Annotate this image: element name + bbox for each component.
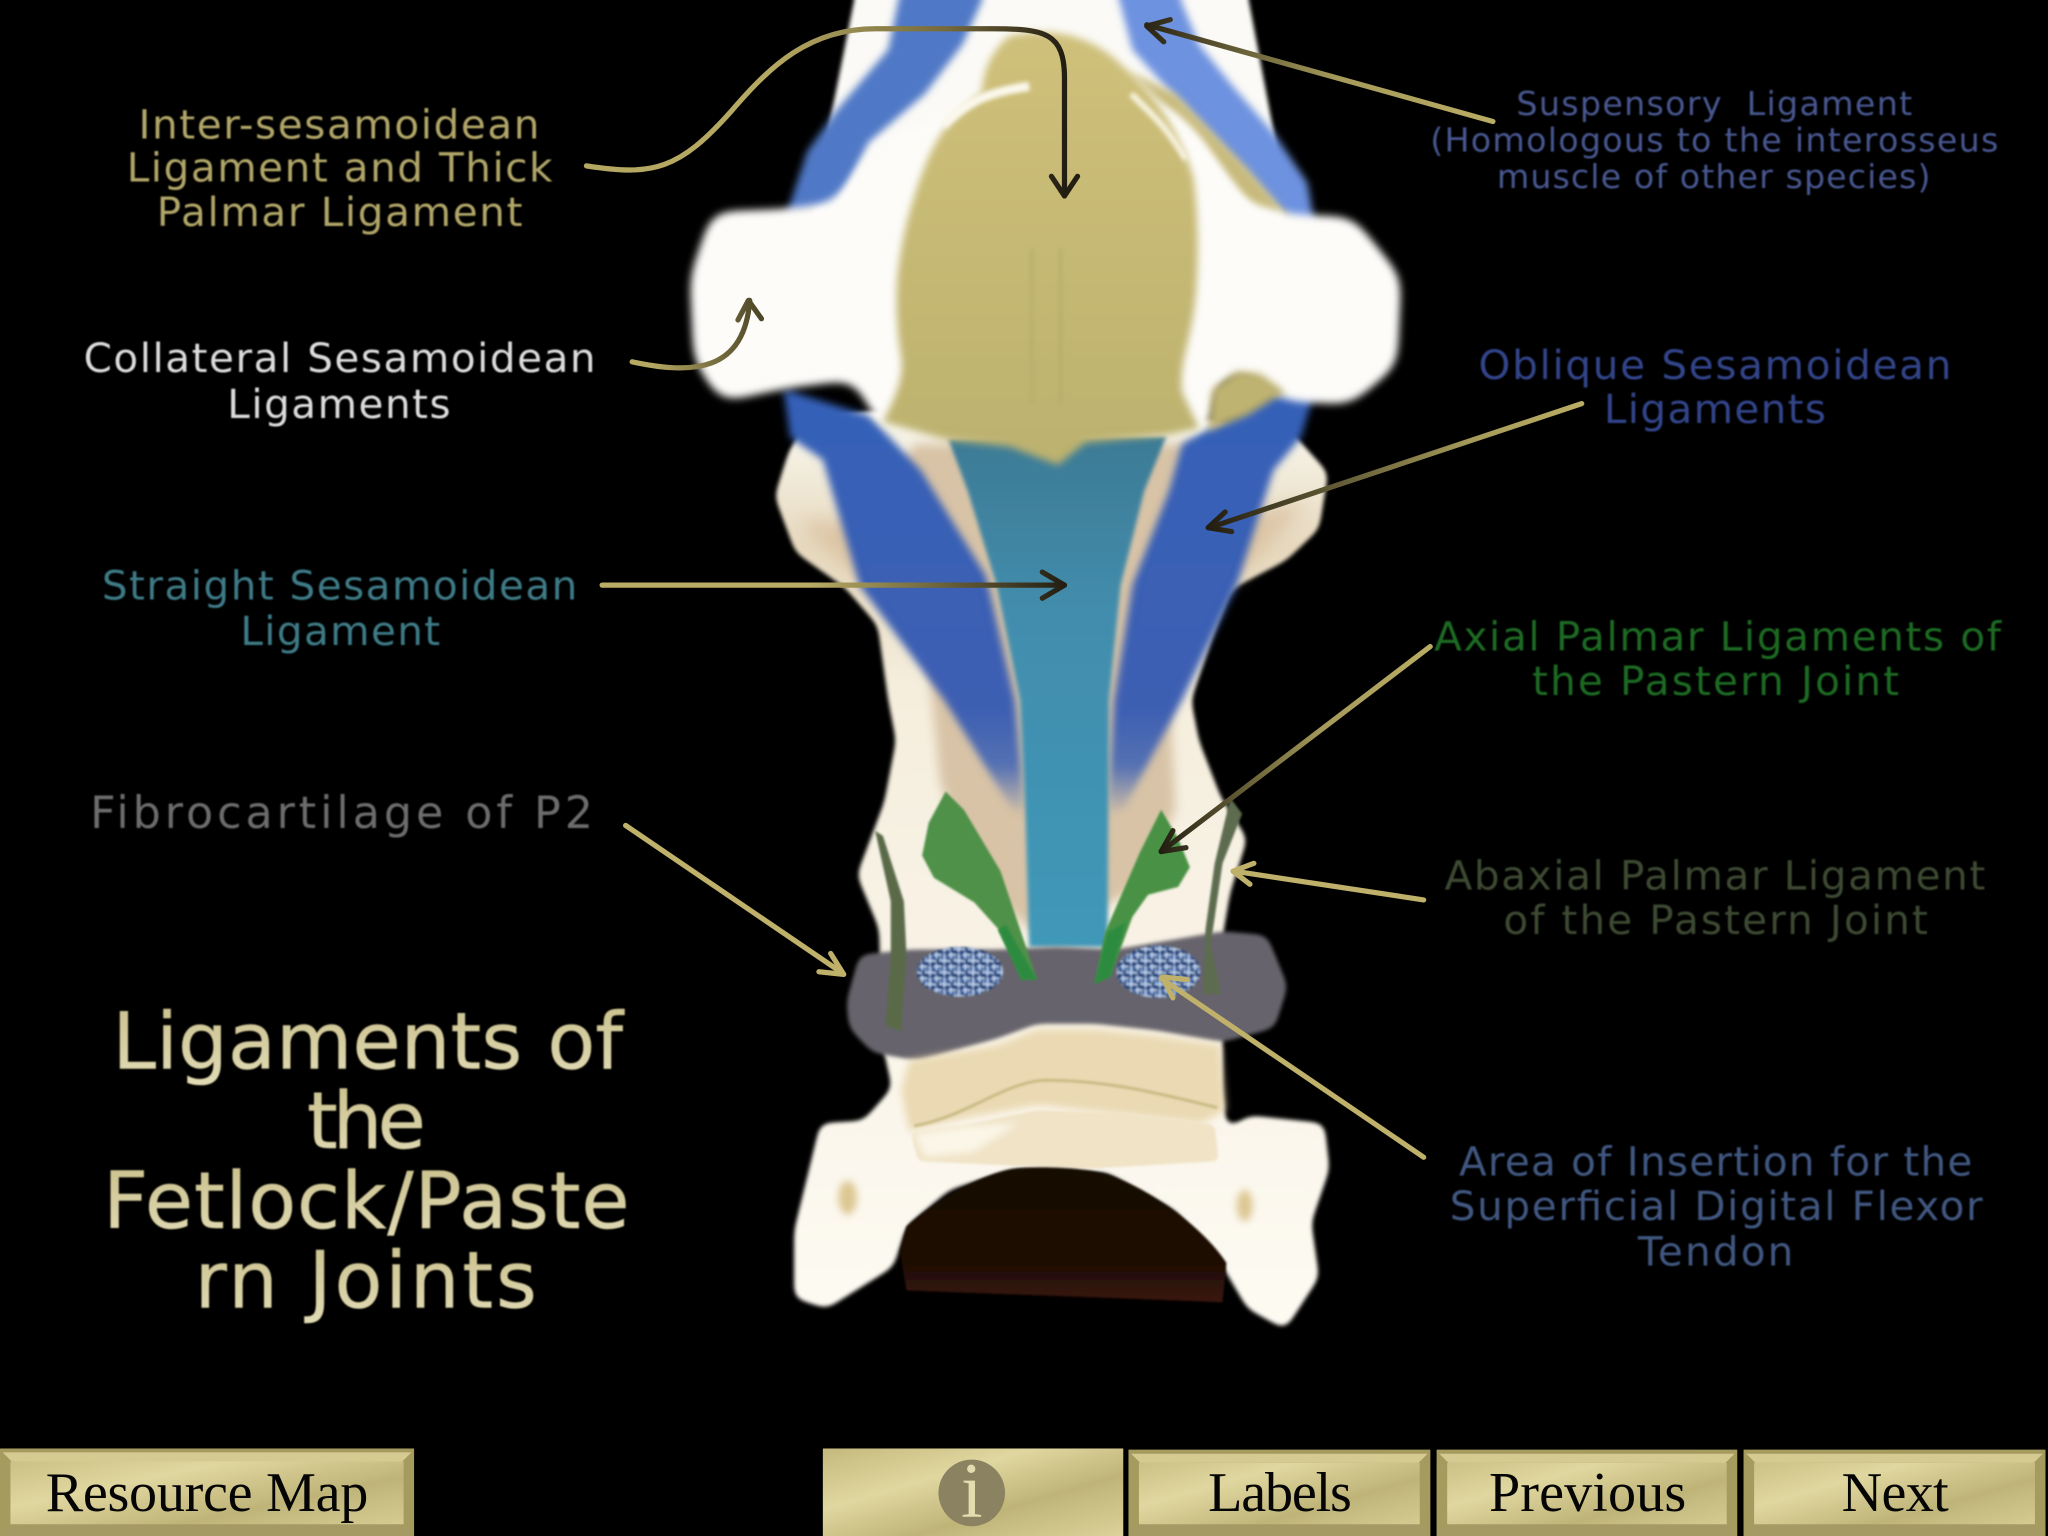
- label: suspensory ligament: Suspensory Ligament: [1516, 84, 1912, 123]
- title: [103, 996, 630, 1326]
- beige inner bone surface: [862, 444, 1215, 940]
- label: oblique sesamoidean ligaments: [1479, 341, 1951, 433]
- label: suspensory ligament: (Homologous to the interosseus: [1430, 121, 1998, 160]
- arrow: straight: [602, 572, 1064, 598]
- label: inter-sesamoidean ligament: Inter-sesamoidean: [138, 100, 539, 148]
- yellow strip beside the right suspensory band: [1130, 72, 1293, 222]
- label: abaxial palmar ligament: of the Pastern Joint: [1503, 896, 1928, 944]
- title: Fetlock/Paste: [103, 1156, 630, 1247]
- tan flare shading on the upper pastern: [799, 503, 1306, 601]
- arrow: area of insertion: [1161, 977, 1424, 1157]
- small yellow ligament patch at right: [1208, 371, 1285, 431]
- label: area of insertion: [1450, 1138, 1983, 1276]
- abaxial palmar ligaments: [875, 798, 1242, 1032]
- label: area of insertion: Tendon: [1637, 1228, 1793, 1276]
- button: next: [1744, 1450, 2045, 1536]
- white highlight on the roller: [914, 1123, 1019, 1157]
- button: info: i: [961, 1446, 983, 1533]
- white sliver on the right of the ligament: [1131, 94, 1186, 159]
- label: inter-sesamoidean ligament: [127, 100, 553, 236]
- pastern joint line: [914, 1080, 1217, 1126]
- button: labels: Labels: [1208, 1462, 1352, 1524]
- dark arch of the distal surface: [900, 1167, 1226, 1302]
- title: rn Joints: [195, 1235, 537, 1326]
- label: collateral sesamoidean ligaments: Collateral Sesamoidean: [84, 334, 596, 382]
- sesamoid bones: [690, 78, 1401, 431]
- button: resource map: [0, 1448, 414, 1536]
- central ridge on the ligament: [1032, 248, 1061, 405]
- button: previous: Previous: [1489, 1462, 1686, 1524]
- anatomical specimen: fetlock and pastern: [690, 0, 1401, 1330]
- label: straight sesamoidean ligament: Ligament: [240, 607, 440, 655]
- arrow: oblique: [1208, 404, 1582, 532]
- label: axial palmar ligaments: Axial Palmar Ligaments of: [1434, 612, 2003, 660]
- straight sesamoidean ligament: [948, 436, 1166, 947]
- arrow: suspensory: [1147, 20, 1493, 121]
- button: info: [823, 1446, 1123, 1536]
- axial palmar ligaments: [922, 792, 1190, 984]
- button: resource map: Resource Map: [46, 1462, 368, 1524]
- lower roller of bone: [910, 1110, 1219, 1169]
- darker feet of the axial ligaments: [998, 922, 1126, 984]
- tan spots on the bone feet: [839, 1181, 1253, 1221]
- title: Ligaments of: [112, 996, 625, 1087]
- upper suspensory ligament bands: [786, 0, 1315, 229]
- label: inter-sesamoidean ligament: Ligament and Thick: [127, 144, 553, 192]
- arrow: axial: [1161, 647, 1430, 852]
- lower bone outline: [775, 392, 1330, 1330]
- label: axial palmar ligaments: [1434, 612, 2003, 705]
- label: fibrocartilage of P2: Fibrocartilage of P2: [90, 788, 593, 839]
- label: oblique sesamoidean ligaments: Ligaments: [1604, 385, 1826, 433]
- label: axial palmar ligaments: the Pastern Joint: [1532, 657, 1899, 705]
- white bone highlights near the pad: [882, 836, 1215, 947]
- label: straight sesamoidean ligament: Straight Sesamoidean: [102, 562, 577, 610]
- arrow: collateral: [632, 300, 761, 368]
- label: oblique sesamoidean ligaments: Oblique Sesamoidean: [1479, 341, 1951, 389]
- label: inter-sesamoidean ligament: Palmar Ligament: [157, 188, 522, 236]
- P2 cream band: [901, 1029, 1225, 1131]
- label: abaxial palmar ligament: Abaxial Palmar Ligament: [1445, 851, 1985, 899]
- label: abaxial palmar ligament: [1445, 851, 1985, 944]
- title: the: [307, 1076, 426, 1167]
- label: collateral sesamoidean ligaments: [84, 334, 596, 428]
- label: area of insertion: Superficial Digital Flexor: [1450, 1182, 1983, 1230]
- arrow: fibrocartilage: [626, 825, 844, 974]
- button: labels: [1128, 1450, 1430, 1536]
- label: area of insertion: Area of Insertion for the: [1459, 1138, 1972, 1186]
- label: suspensory ligament: muscle of other species): [1497, 157, 1930, 196]
- label: straight sesamoidean ligament: [102, 562, 577, 655]
- insertion area discs: [917, 946, 1200, 998]
- upper bone shaft: [810, 0, 1287, 235]
- arrow: abaxial: [1233, 863, 1424, 900]
- button: previous: [1437, 1450, 1737, 1536]
- inter-sesamoidean ligament: [883, 32, 1199, 465]
- label: suspensory ligament: [1430, 84, 1998, 196]
- fibrocartilage of P2: [846, 931, 1288, 1061]
- oblique sesamoidean ligaments: [784, 389, 1315, 816]
- label: collateral sesamoidean ligaments: Ligaments: [227, 380, 451, 428]
- button: next: Next: [1842, 1462, 1949, 1524]
- white sliver on the inter-sesamoidean ligament: [943, 86, 1029, 125]
- arrow: inter-sesamoidean: [586, 29, 1078, 196]
